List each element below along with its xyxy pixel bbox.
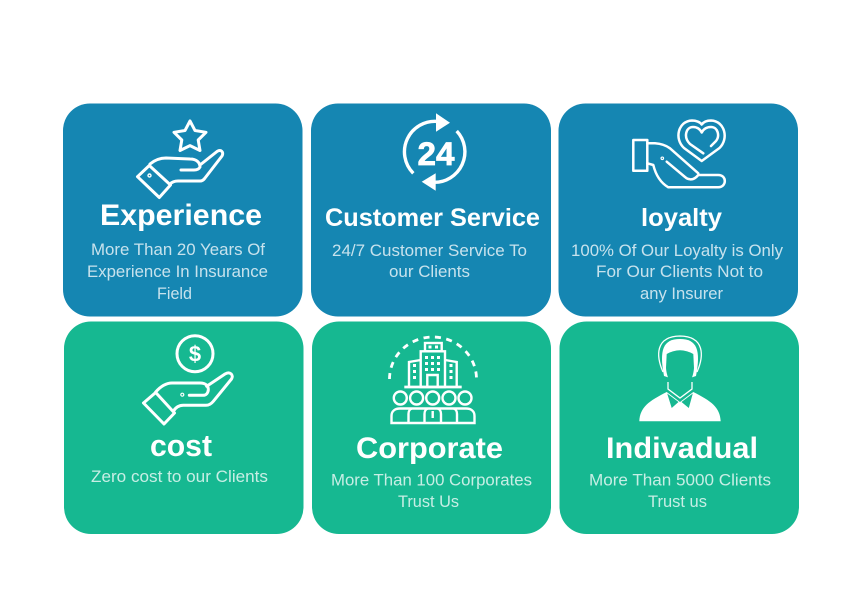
description: individual: More Than 5000 Clients: [589, 470, 771, 490]
description: experience: [87, 240, 268, 303]
panel: individual: [560, 322, 799, 534]
description: corporate: Trust Us: [398, 492, 459, 511]
description: corporate: More Than 100 Corporates: [331, 470, 532, 490]
icon: hand receiving coin: $: [189, 342, 201, 366]
description: loyalty: 100% Of Our Loyalty is Only: [571, 241, 783, 260]
description: experience: More Than 20 Years Of: [91, 240, 265, 259]
panel: experience: [63, 104, 302, 316]
description: customer service: our Clients: [389, 262, 470, 281]
description: customer service: 24/7 Customer Service To: [332, 241, 527, 260]
panel: corporate: [312, 322, 551, 534]
icon: hand receiving coin: [144, 336, 232, 424]
panel: customer service: [311, 104, 551, 316]
description: cost: Zero cost to our Clients: [91, 467, 268, 486]
description: corporate: [331, 470, 532, 511]
description: customer service: [332, 241, 527, 281]
heading: experience: Experience: [100, 199, 262, 232]
description: experience: Field: [157, 284, 192, 303]
icon: hand holding star: [138, 121, 223, 198]
icon: office building and people: [390, 337, 477, 423]
icon: 24 hour arrows: [404, 113, 465, 191]
heading: individual: Indivadual: [606, 432, 758, 465]
panel: cost: [64, 322, 304, 534]
heading: loyalty: loyalty: [641, 204, 722, 232]
icon: hand holding heart: [633, 120, 725, 187]
description: experience: Experience In Insurance: [87, 262, 268, 281]
description: individual: Trust us: [648, 492, 707, 511]
description: loyalty: [571, 241, 783, 303]
description: loyalty: any Insurer: [640, 284, 723, 303]
heading: cost: cost: [150, 428, 212, 463]
icon: person portrait: [639, 336, 721, 421]
description: individual: [589, 470, 771, 511]
icon: 24 hour arrows: 24: [418, 136, 455, 172]
heading: corporate: Corporate: [356, 432, 503, 465]
panel: loyalty: [558, 104, 798, 316]
heading: customer service: Customer Service: [325, 204, 540, 232]
description: loyalty: For Our Clients Not to: [596, 262, 763, 281]
